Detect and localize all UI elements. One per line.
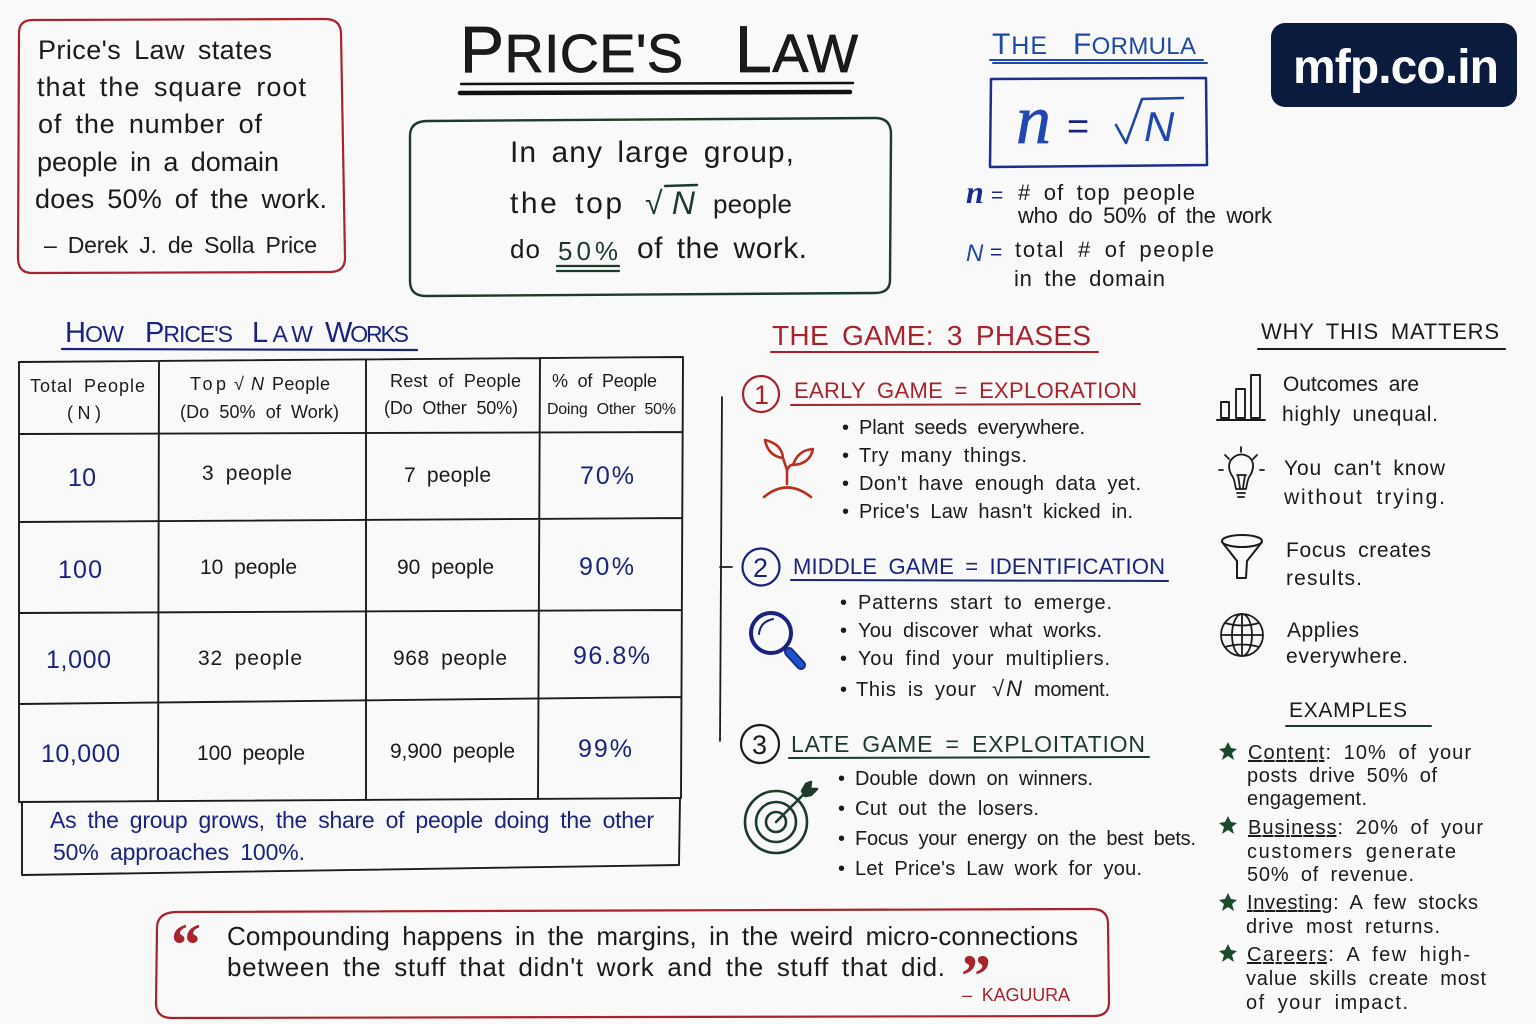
phase 2 bullets: You discover what works. [858, 620, 1102, 642]
phase 3 bullets: • [838, 858, 845, 880]
example text [1247, 817, 1483, 886]
heading: how price's law works [62, 317, 417, 350]
formula heading [990, 28, 1207, 63]
reason: can't know without trying [1219, 447, 1446, 509]
phase 1 number: 1 [754, 380, 769, 410]
formula definitions: who do 50% of the work [1017, 203, 1273, 228]
definition text: – Derek J. de Solla Price [44, 232, 317, 258]
statement text: of the work. [637, 232, 807, 265]
title: PRICE'S [460, 12, 683, 86]
quote text [227, 921, 1078, 982]
formula expression: = [1067, 106, 1089, 148]
definition box [18, 19, 345, 273]
table row: 1,000 [46, 642, 650, 674]
icon: star [1219, 893, 1237, 911]
title [460, 12, 858, 93]
phase 2 bullets: • [840, 620, 847, 642]
formula heading: FORMULA [1073, 28, 1196, 61]
phase 1 bullets: Don't have enough data yet. [859, 473, 1141, 495]
logo: mfp.co.in: mfp.co.in [1293, 41, 1499, 94]
reason text: Outcomes are [1283, 373, 1419, 396]
formula expression: N [1144, 103, 1175, 150]
title: LAW [735, 12, 858, 86]
closing quote mark: ” [961, 943, 991, 1009]
table row: 10,000: 9,900 people [390, 740, 515, 763]
statement text [510, 136, 807, 271]
phase 3: late game [741, 725, 1196, 880]
formula expression: n [1016, 82, 1051, 159]
phase 2 number: 2 [753, 553, 768, 583]
phase 2 bullets [840, 592, 1112, 701]
phase 1 bullets: • [842, 445, 849, 467]
example: investing [1219, 892, 1478, 938]
reason text [1282, 373, 1438, 426]
phases timeline line [720, 397, 732, 741]
formula definitions: = [990, 241, 1002, 264]
phase 2 bullets: √N [992, 676, 1022, 701]
table row: 100 [58, 553, 634, 584]
table row: 10,000 [41, 735, 632, 768]
phase 3 bullets: Focus your energy on the best bets. [855, 828, 1196, 850]
example: careers [1219, 944, 1486, 1014]
formula definitions: N [966, 240, 984, 267]
phase 1 heading: EARLY GAME = EXPLORATION [794, 378, 1137, 403]
reason: applies everywhere [1221, 614, 1408, 668]
table footnote: As the group grows, the share of people doing the other [50, 807, 654, 833]
phase 3 bullets: • [838, 828, 845, 850]
table row: 1,000: 96.8% [573, 642, 650, 670]
phase 1 bullets: Plant seeds everywhere. [859, 417, 1085, 439]
formula heading: THE [992, 28, 1047, 61]
icon: magnifying glass [751, 613, 801, 665]
icon: target with arrow [745, 782, 817, 853]
formula expression [1016, 82, 1183, 159]
table footnote [22, 798, 680, 875]
table header: Total People [30, 376, 145, 396]
example text: Investing: A few stocks [1247, 892, 1478, 914]
formula box [990, 78, 1207, 167]
formula definitions: # of top people [1018, 180, 1195, 205]
definition text: people in a domain [37, 147, 279, 177]
reason text [1286, 619, 1408, 668]
table header: Doing Other 50% [547, 401, 676, 418]
quote attribution: – KAGUURA [962, 985, 1070, 1005]
phase 1 bullets: • [842, 473, 849, 495]
panel: definition [18, 19, 345, 273]
formula definitions [966, 174, 1273, 291]
reason text [1283, 457, 1446, 509]
table row: 100: 10 people [200, 556, 297, 579]
heading: why this matters: WHY THIS MATTERS [1261, 319, 1499, 344]
reason text [1286, 539, 1431, 590]
statement text: do [510, 234, 540, 264]
example text: of your impact. [1246, 992, 1408, 1014]
phase 1 bullets: Price's Law hasn't kicked in. [859, 501, 1133, 523]
reason text: without trying. [1283, 486, 1445, 509]
example text: Careers: A few high- [1247, 944, 1470, 966]
quote box [156, 909, 1109, 1018]
table: how the law scales [19, 357, 683, 802]
table row: 10: 10 [68, 464, 96, 492]
example text [1247, 742, 1471, 810]
phase 2 bullets: • [840, 648, 847, 670]
example text: value skills create most [1246, 968, 1486, 990]
table row: 10: 70% [580, 462, 634, 490]
table row: 10: 7 people [404, 464, 491, 487]
icon: funnel [1222, 535, 1262, 578]
logo: mfp.co.in [1271, 23, 1517, 107]
example text: posts drive 50% of [1247, 765, 1437, 787]
reason: focus creates results [1222, 535, 1431, 590]
phase 3 number: 3 [752, 730, 767, 760]
phase 3 heading: LATE GAME = EXPLOITATION [791, 731, 1145, 757]
icon: star [1219, 816, 1237, 834]
icon: light bulb [1219, 447, 1264, 497]
example text: 50% of revenue. [1247, 864, 1414, 886]
table row: 100: 90% [579, 553, 634, 581]
panel: key statement [410, 118, 891, 296]
table row: 100: 100 [58, 556, 102, 584]
quote text: between the stuff that didn't work and the stuff that did. [227, 952, 945, 982]
heading: the game 3 phases: THE GAME: 3 PHASES [772, 320, 1091, 351]
table row: 1,000: 32 people [198, 647, 302, 670]
table header: √N [234, 374, 265, 394]
reason text: Applies [1287, 619, 1359, 642]
phase 1 bullets: • [842, 501, 849, 523]
reason text: You can't know [1284, 457, 1446, 480]
example text: Business: 20% of your [1248, 817, 1483, 839]
phase 3 bullets: Let Price's Law work for you. [855, 858, 1142, 880]
phase 1 bullets: • [842, 417, 849, 439]
definition text: of the number of [38, 109, 262, 139]
panel: quote [156, 909, 1109, 1018]
table row: 10,000: 99% [578, 735, 632, 763]
table grid [19, 357, 683, 802]
phase 3 bullets: Cut out the losers. [855, 798, 1039, 820]
phase 3 number [741, 725, 779, 763]
table row: 10,000: 100 people [197, 742, 305, 765]
table row: 10,000: 10,000 [41, 740, 120, 768]
table footnote: 50% approaches 100%. [53, 839, 305, 865]
statement text: people [713, 189, 792, 219]
icon: bar chart [1217, 375, 1265, 420]
example: content [1219, 742, 1471, 810]
statement text: In any large group, [510, 136, 794, 169]
phase 2 bullets: • [840, 592, 847, 614]
example text: customers generate [1247, 841, 1456, 863]
example text [1246, 944, 1486, 1014]
opening quote mark: “ [171, 912, 201, 978]
reason: outcomes unequal [1217, 373, 1438, 426]
table header [30, 371, 676, 423]
example text: Content: 10% of your [1248, 742, 1471, 764]
phase 2 bullets: You find your multipliers. [858, 648, 1110, 670]
table row: 1,000: 968 people [393, 647, 507, 670]
formula definitions: = [991, 184, 1003, 207]
phase 3 bullets: • [838, 768, 845, 790]
statement text: the top [510, 187, 622, 220]
definition text: does 50% of the work. [35, 184, 327, 214]
example: business [1219, 816, 1483, 886]
phase 2 bullets: • [840, 679, 847, 701]
statement box [410, 118, 891, 296]
table header: Top [190, 374, 226, 394]
reason text: everywhere. [1286, 645, 1408, 668]
phase 1 number [743, 376, 779, 412]
statement text: √ N [645, 185, 696, 221]
table row: 10 [68, 462, 634, 492]
reason text: highly unequal. [1282, 403, 1438, 426]
panel: the formula [966, 28, 1273, 291]
table row: 10: 3 people [202, 462, 292, 485]
phase 1 bullets: Try many things. [859, 445, 1027, 467]
phase 2 bullets: moment. [1034, 679, 1110, 701]
definition text [35, 35, 327, 258]
phase 2 bullets: This is your [856, 679, 976, 701]
example text [1246, 892, 1478, 938]
formula definitions: in the domain [1014, 266, 1165, 291]
phase 1: early game [743, 376, 1141, 523]
table row: 1,000: 1,000 [46, 646, 111, 674]
icon: star [1219, 742, 1237, 760]
phase 2 heading: MIDDLE GAME = IDENTIFICATION [793, 554, 1165, 579]
icon: globe [1221, 614, 1263, 656]
reason text: Focus creates [1286, 539, 1431, 562]
icon: star [1219, 944, 1237, 962]
icon: sprout [764, 440, 813, 497]
table header: Rest of People [390, 371, 521, 391]
definition text: that the square root [37, 72, 306, 102]
table header: (Do 50% of Work) [180, 402, 339, 422]
phase 2 bullets: Patterns start to emerge. [858, 592, 1112, 614]
statement text: 50% [558, 236, 618, 266]
table header: People [272, 374, 330, 394]
phase 3 bullets: • [838, 798, 845, 820]
table header: (Do Other 50%) [384, 398, 518, 418]
heading: how price's law works: PRICE'S [145, 317, 233, 349]
table row: 100: 90 people [397, 556, 494, 579]
formula definitions: total # of people [1015, 237, 1214, 262]
heading: how price's law works: WORKS [325, 317, 409, 349]
table header: (N) [67, 403, 101, 423]
example text: drive most returns. [1246, 916, 1440, 938]
phase 3 bullets [838, 768, 1196, 880]
heading: examples: EXAMPLES [1289, 699, 1407, 722]
phase 3 bullets: Double down on winners. [855, 768, 1093, 790]
table header: % of People [552, 371, 657, 391]
phase 2 number [742, 548, 780, 586]
heading: how price's law works: LAW [252, 317, 313, 349]
formula definitions: n [966, 174, 984, 210]
phase 2: middle game [742, 548, 1168, 701]
phase 1 bullets [842, 417, 1141, 523]
example text: engagement. [1247, 788, 1367, 810]
heading: how price's law works: HOW [65, 317, 124, 349]
reason text: results. [1286, 567, 1362, 590]
quote text: Compounding happens in the margins, in the weird micro-connections [227, 921, 1078, 951]
definition text: Price's Law states [38, 35, 272, 65]
